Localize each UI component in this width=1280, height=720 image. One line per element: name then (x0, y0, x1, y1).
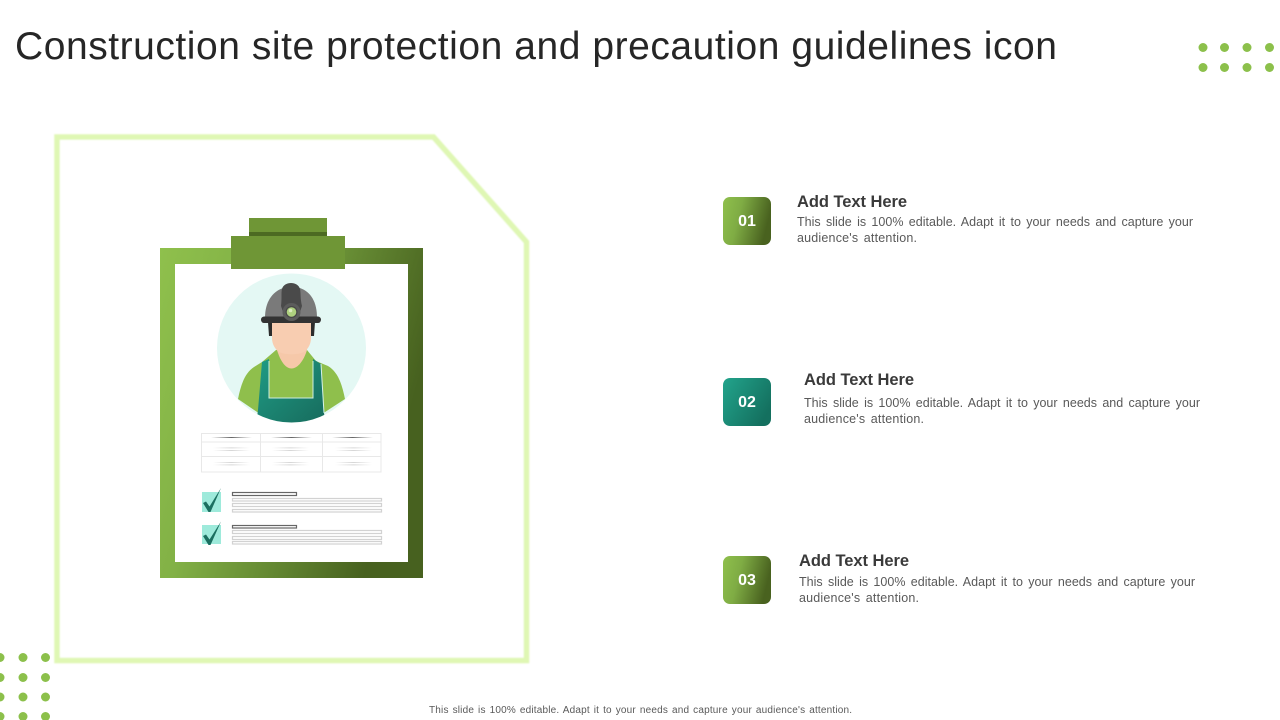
worker portrait (217, 274, 366, 425)
item 02 (723, 371, 1200, 426)
item 01 heading: Add Text Here (797, 193, 907, 211)
badge 03 (723, 556, 771, 604)
decorative dots: top right (1198, 43, 1274, 72)
checklist item 1 (202, 488, 382, 512)
neck (277, 343, 307, 368)
item 03 description: audience's attention. (799, 591, 919, 605)
decorative dots: bottom left (0, 653, 50, 720)
item 01 description: audience's attention. (797, 231, 917, 245)
data table (202, 434, 381, 472)
badge 02 (723, 378, 771, 426)
item 02 description: This slide is 100% editable. Adapt it to your needs and capture your (804, 396, 1200, 410)
clipboard illustration (160, 218, 423, 578)
item 01 description (797, 215, 1193, 245)
shirt (238, 350, 345, 414)
badge 03: 03 (738, 572, 756, 589)
badge 01 (723, 197, 771, 245)
item 03 description (799, 575, 1195, 605)
footer note: This slide is 100% editable. Adapt it to your needs and capture your audience's attention. (429, 705, 852, 716)
face (272, 322, 311, 354)
panel: cut-corner frame (57, 137, 526, 660)
item 02 heading: Add Text Here (804, 371, 914, 389)
item 03 heading: Add Text Here (799, 552, 909, 570)
item 01 description: This slide is 100% editable. Adapt it to your needs and capture your (797, 215, 1193, 229)
title: Construction site protection and precaution guidelines icon (15, 25, 1057, 68)
clipboard clip (231, 218, 345, 269)
clipboard board (160, 248, 423, 578)
item 01 (723, 193, 1193, 245)
badge 01: 01 (738, 213, 756, 230)
badge 02: 02 (738, 394, 756, 411)
checklist item 2 (202, 522, 382, 545)
hair (268, 322, 315, 336)
clipboard paper (175, 264, 408, 562)
item 03 (723, 552, 1195, 605)
item 02 description: audience's attention. (804, 412, 924, 426)
item 02 description (804, 396, 1200, 426)
helmet (261, 283, 321, 323)
item 03 description: This slide is 100% editable. Adapt it to your needs and capture your (799, 575, 1195, 589)
apron (256, 359, 326, 425)
